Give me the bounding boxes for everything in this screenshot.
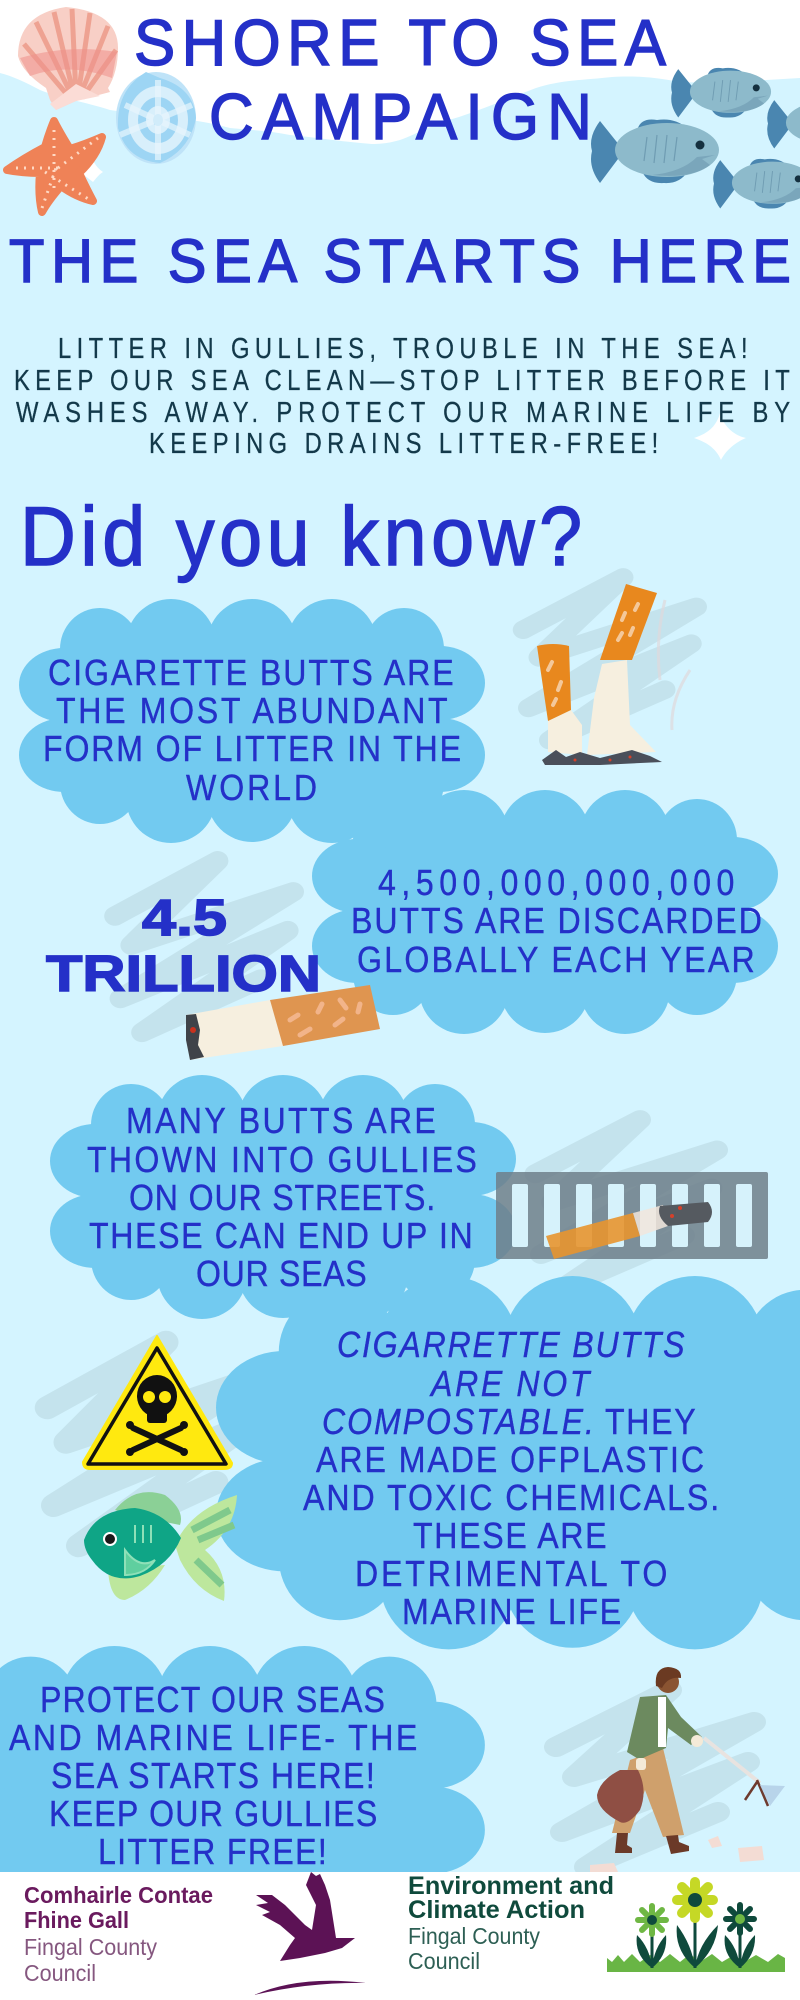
white sparkle: lower: [694, 413, 746, 460]
cloud text 5: LITTER FREE!: [98, 1832, 327, 1872]
white wave at top: [0, 0, 800, 144]
cloud text 4: [303, 1325, 719, 1632]
cloud text 4: THESE ARE: [413, 1516, 607, 1556]
footer: Environment and Climate Action text: Council: [408, 1948, 480, 1974]
cloud panel: discarded butts: [312, 790, 778, 1034]
white sparkle: near starfish: [80, 158, 103, 182]
intro text: WASHES AWAY. PROTECT OUR MARINE LIFE BY: [16, 396, 790, 429]
cloud text 4: DETRIMENTAL TO: [355, 1554, 667, 1594]
title: CAMPAIGN: [209, 82, 592, 153]
cloud text 3: MANY BUTTS ARE: [126, 1101, 436, 1141]
cloud text 1: THE MOST ABUNDANT: [56, 691, 448, 731]
title: [134, 8, 667, 153]
intro text: KEEP OUR SEA CLEAN—STOP LITTER BEFORE IT: [14, 364, 790, 397]
scribble: behind butts: [523, 577, 696, 740]
cloud text 3: [87, 1101, 477, 1294]
footer: Fingal County Council logo text: Comhairle Contae: [24, 1882, 213, 1908]
cloud text 3: ON OUR STREETS.: [129, 1178, 435, 1218]
cloud text 1: CIGARETTE BUTTS ARE: [48, 653, 454, 693]
subtitle: THE SEA STARTS HERE: [9, 227, 791, 295]
cloud text 2: BUTTS ARE DISCARDED: [351, 901, 762, 941]
cloud text 4: ARE NOT: [429, 1364, 592, 1404]
illustration: spiral shell: [116, 72, 196, 164]
cloud text 1: FORM OF LITTER IN THE: [43, 729, 461, 769]
footer: Environment and Climate Action text: Fingal County: [408, 1923, 540, 1949]
cloud text 1: [43, 653, 461, 808]
intro text: KEEPING DRAINS LITTER-FREE!: [149, 427, 658, 460]
illustration: cigarette: [186, 985, 380, 1060]
cloud text 5: [9, 1680, 417, 1872]
footer: Fingal County Council logo text: Council: [24, 1960, 96, 1986]
icon: flowers logo: [607, 1882, 785, 1972]
big stat: 4.5 trillion: TRILLION: [46, 945, 321, 1002]
cloud text 2: 4,500,000,000,000: [378, 863, 734, 903]
footer: Fingal County Council logo text: [24, 1882, 213, 1986]
cloud panel: call to action: [0, 1646, 485, 1934]
cloud text 4: ARE MADE OFPLASTIC: [316, 1440, 704, 1480]
icon: toxic warning sign: [83, 1336, 232, 1469]
title: SHORE TO SEA: [134, 8, 667, 79]
cloud text 4: THEY: [605, 1402, 696, 1442]
intro text: [14, 332, 790, 460]
big stat: 4.5 trillion: [46, 889, 321, 1002]
intro text: LITTER IN GULLIES, TROUBLE IN THE SEA!: [58, 332, 748, 365]
big stat: 4.5 trillion: 4.5: [142, 889, 227, 946]
cloud panel: not compostable: [216, 1276, 800, 1649]
cloud panel: abundant litter: [19, 599, 485, 843]
cloud text 2: [351, 863, 762, 980]
illustration: fish group: [591, 68, 800, 209]
illustration: starfish: [7, 121, 102, 212]
footer: Fingal County Council logo text: Fingal County: [24, 1934, 157, 1960]
cloud panel: gullies: [50, 1075, 516, 1319]
scribble: behind warning: [47, 1342, 254, 1546]
cloud text 5: KEEP OUR GULLIES: [49, 1794, 377, 1834]
cloud text 1: WORLD: [186, 768, 317, 808]
cloud text 4: AND TOXIC CHEMICALS.: [303, 1478, 719, 1518]
cloud text 4: CIGARRETTE BUTTS: [337, 1325, 685, 1365]
footer band: [0, 1872, 800, 2000]
heading: did you know: Did you know?: [20, 490, 582, 584]
scribble: behind grate: [536, 1120, 717, 1288]
cloud text 2: GLOBALLY EACH YEAR: [357, 940, 755, 980]
illustration: green fish: [84, 1492, 237, 1601]
illustration: person picking litter: [590, 1667, 785, 1872]
cloud text 5: SEA STARTS HERE!: [51, 1756, 375, 1796]
cloud text 3: OUR SEAS: [196, 1254, 367, 1294]
cloud text 3: THOWN INTO GULLIES: [87, 1140, 477, 1180]
footer: Environment and Climate Action text: Climate Action: [408, 1896, 585, 1924]
illustration: drain grate with cigarette: [496, 1172, 768, 1259]
footer: Fingal County Council logo text: Fhine Gall: [24, 1907, 129, 1933]
scribble: behind person: [556, 1690, 754, 1867]
illustration: two cigarette butts: [537, 584, 690, 765]
scribble: behind trillion: [115, 861, 293, 1032]
footer: Environment and Climate Action text: Environment and: [408, 1872, 614, 1900]
icon: eagle logo: [254, 1872, 366, 1995]
footer: Environment and Climate Action text: [408, 1872, 614, 1974]
cloud text 3: THESE CAN END UP IN: [89, 1216, 473, 1256]
illustration: scallop shell: [18, 7, 118, 110]
cloud text 4: COMPOSTABLE.: [322, 1402, 594, 1442]
cloud text 4: MARINE LIFE: [402, 1592, 621, 1632]
cloud text 5: AND MARINE LIFE- THE: [9, 1718, 417, 1758]
cloud text 5: PROTECT OUR SEAS: [40, 1680, 385, 1720]
